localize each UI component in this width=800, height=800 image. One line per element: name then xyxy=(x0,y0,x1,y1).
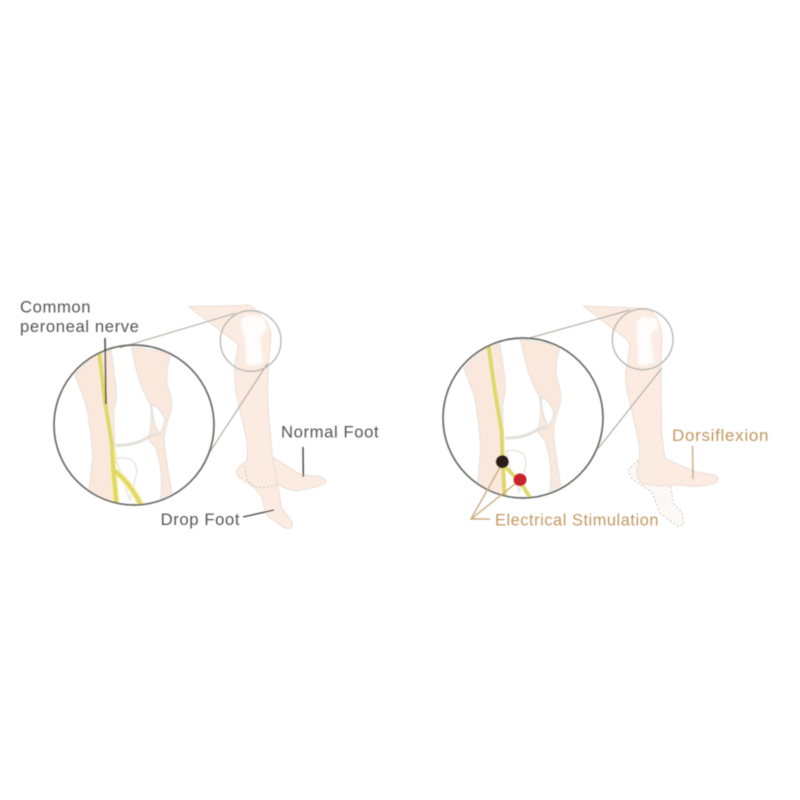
panel: drop foot xyxy=(20,298,379,529)
magnifier: small knee circle xyxy=(220,311,281,371)
magnifier connector lines xyxy=(120,313,268,452)
magnifier: small knee circle xyxy=(612,309,673,370)
magnifier connector lines xyxy=(520,310,662,448)
pointer: dorsiflexion xyxy=(692,446,694,479)
label: electrical stimulation: Electrical Stimulation xyxy=(495,512,659,530)
magnified knee inset xyxy=(54,345,214,508)
infographic xyxy=(20,300,768,530)
label: normal foot: Normal Foot xyxy=(281,423,379,442)
leg illustration xyxy=(120,305,326,529)
nerve xyxy=(488,345,533,502)
leg illustration xyxy=(520,306,718,527)
label: common peroneal nerve: peroneal nerve xyxy=(20,317,140,336)
pointers: stimulation xyxy=(471,462,520,519)
magnifier: large inset circle xyxy=(443,338,603,498)
panel: electrical stimulation xyxy=(443,306,769,530)
pointer: drop foot xyxy=(243,510,274,517)
nerve xyxy=(99,353,143,508)
pointer: nerve xyxy=(105,338,106,404)
magnifier: large inset circle xyxy=(54,345,214,505)
label: common peroneal nerve: Common xyxy=(20,298,91,317)
electrode: red xyxy=(514,473,526,486)
pointer: normal foot xyxy=(302,447,304,477)
label: common peroneal nerve xyxy=(20,298,140,336)
electrode: black xyxy=(496,455,509,468)
label: drop foot: Drop Foot xyxy=(161,510,240,529)
label: dorsiflexion: Dorsiflexion xyxy=(672,426,769,445)
magnified knee inset xyxy=(443,338,603,502)
